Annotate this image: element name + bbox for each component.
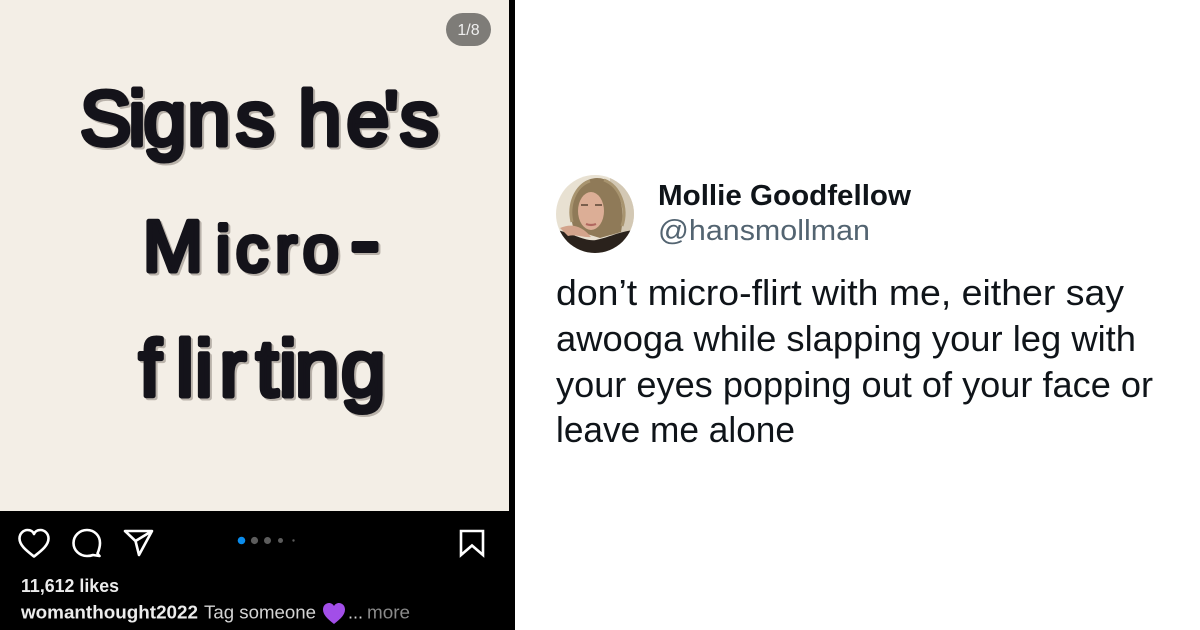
caption: ...: [348, 602, 363, 622]
post title: Signs he's Micro-flirting: o: [303, 213, 339, 285]
hair: [571, 178, 622, 238]
hand: [560, 226, 591, 237]
post title: Signs he's Micro-flirting: [80, 76, 438, 413]
post image background: [0, 0, 509, 511]
icon: heart: [20, 530, 48, 556]
avatar: [556, 175, 634, 253]
caption: womanthought2022: [20, 602, 198, 622]
caption: [20, 602, 410, 624]
face: [578, 192, 604, 230]
likes count: 11,612 likes: [21, 576, 119, 596]
tweet body: awooga while slapping your leg with: [556, 318, 1136, 359]
post title: Signs he's Micro-flirting: M: [143, 207, 203, 287]
carousel dots: [238, 537, 295, 544]
caption: more: [367, 602, 410, 622]
author handle: @hansmollman: [658, 215, 870, 247]
slide counter badge: [446, 13, 491, 46]
post title: Signs he's Micro-flirting: r: [276, 213, 297, 285]
post title: Signs he's Micro-flirting: i: [216, 213, 230, 285]
tweet body: your eyes popping out of your face or: [556, 364, 1153, 405]
panel: tweet: [556, 175, 1153, 450]
tweet body: [556, 272, 1153, 450]
icon: send arrow: [125, 531, 152, 555]
dark top: [560, 230, 630, 253]
post title: Signs he's Micro-flirting: flirting: [139, 324, 386, 413]
icon: purple heart: [323, 603, 345, 624]
author name: Mollie Goodfellow: [658, 180, 911, 212]
caption: Tag someone: [204, 602, 316, 622]
post title: Signs he's Micro-flirting: Signs he's: [80, 76, 438, 162]
panel: Instagram post: [0, 0, 515, 630]
slide counter badge: 1/8: [457, 22, 480, 39]
post title: Signs he's Micro-flirting: -: [350, 191, 380, 291]
icon: bookmark: [461, 531, 483, 555]
tweet body: don’t micro-flirt with me, either say: [556, 272, 1125, 313]
icon: comment bubble: [74, 530, 100, 556]
post title: Signs he's Micro-flirting: c: [236, 213, 268, 285]
tweet body: leave me alone: [556, 409, 795, 450]
